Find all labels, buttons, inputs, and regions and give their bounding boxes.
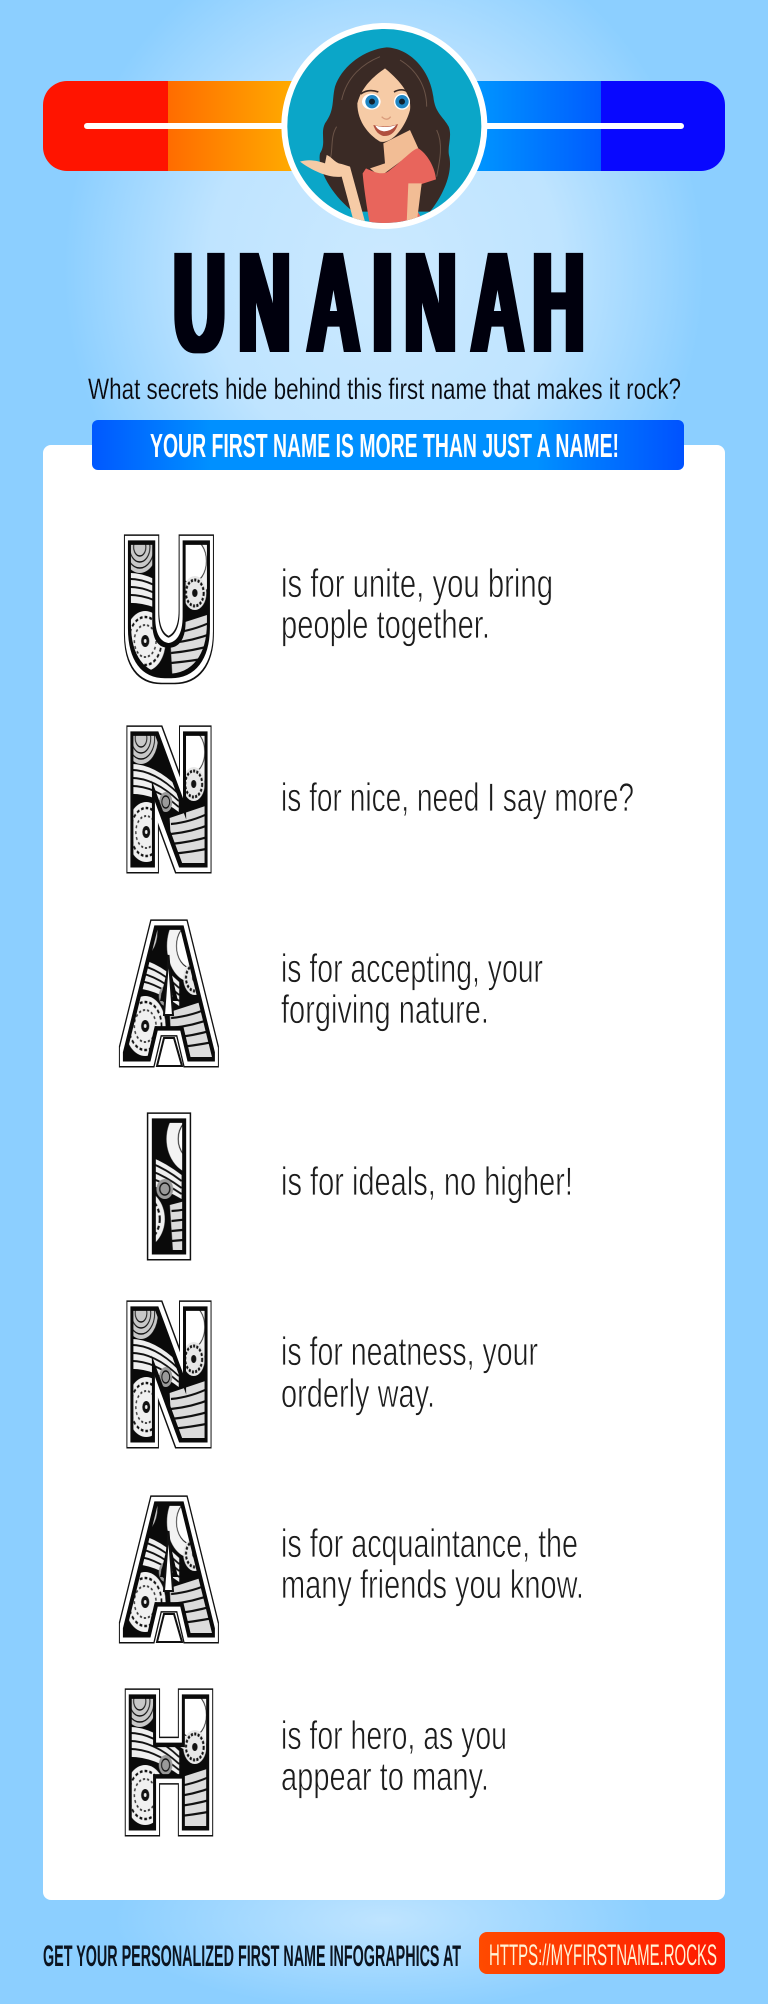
row 6: letter A: is for acquaintance, the [281,1522,578,1566]
banner: tagline [92,420,684,470]
header colour bar [43,81,725,171]
row 5: letter N: orderly way. [281,1372,435,1416]
row 3: letter A [126,895,543,1091]
row 6: letter A [126,1471,584,1667]
row 2: letter N [128,702,634,898]
row 3: letter A: is for accepting, your [281,947,543,991]
row 4: letter I: is for ideals, no higher! [281,1160,573,1204]
row 4: letter I [148,1089,573,1285]
row 1: letter U: is for unite, you bring [281,562,553,606]
footer url button [479,1932,725,1974]
row 2: letter N: N [128,702,210,898]
row 7: letter H: appear to many. [281,1755,489,1799]
row 3: letter A: A [126,895,212,1091]
row 6: letter A: A [126,1471,212,1667]
row 3: letter A: forgiving nature. [281,988,489,1032]
title: UNAINAH [173,223,584,384]
row 1: letter U [126,510,553,706]
row 6: letter A: many friends you know. [281,1563,584,1607]
row 1: letter U: people together. [281,603,490,647]
row 7: letter H [126,1664,507,1860]
row 5: letter N [128,1277,538,1473]
panel: white content card [43,420,725,1900]
row 7: letter H: H [126,1664,212,1860]
row 5: letter N: N [128,1277,210,1473]
row 4: letter I: I [148,1089,190,1285]
row 7: letter H: is for hero, as you [281,1714,507,1758]
row 5: letter N: is for neatness, your [281,1330,538,1374]
avatar: woman in coral top [284,26,484,226]
row 1: letter U: U [126,510,212,706]
